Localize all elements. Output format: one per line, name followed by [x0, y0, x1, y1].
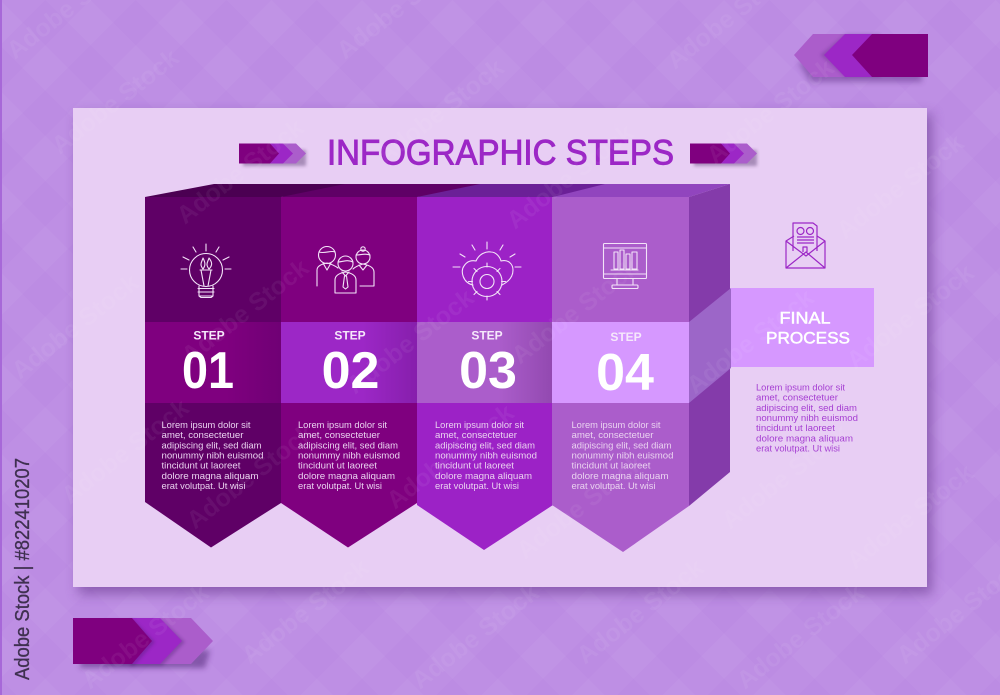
watermark: Adobe Stock [46, 44, 184, 160]
text: step 4 body: erat volutpat. Ut wisi [572, 480, 656, 491]
text: step 3 body: adipiscing elit, sed diam [435, 439, 535, 450]
text: step 1 body: amet, consectetuer [162, 429, 244, 440]
text: step 2 body: nonummy nibh euismod [298, 450, 400, 460]
text: final process body: amet, consectetuer [756, 392, 838, 403]
icon: monitor with chart [604, 244, 646, 288]
text: step 1 body: erat volutpat. Ut wisi [162, 480, 246, 491]
text: step 3 body: Lorem ipsum dolor sit [435, 419, 524, 430]
watermark: Adobe Stock [236, 554, 374, 670]
watermark: Adobe Stock [831, 129, 969, 245]
panel: step 3 [417, 197, 553, 550]
watermark: Adobe Stock [6, 269, 144, 385]
icon: cloud with gear [453, 242, 521, 300]
icon: envelope with document [786, 223, 825, 268]
panel: final process: PROCESS [766, 328, 850, 348]
text: final process body: adipiscing elit, sed diam [756, 402, 857, 413]
number 04: 04 [596, 344, 654, 402]
panel: final process: FINAL [780, 308, 830, 328]
watermark: Adobe Stock [341, 284, 479, 400]
watermark: Adobe Stock [731, 579, 869, 695]
panel: step 4 [552, 197, 689, 552]
watermark: Adobe Stock [571, 554, 709, 670]
title: INFOGRAPHIC STEPS [327, 134, 674, 172]
watermark: Adobe Stock [406, 579, 544, 695]
watermark: Adobe Stock [381, 399, 519, 515]
number 02: 02 [322, 342, 379, 400]
step label 04: STEP [610, 330, 642, 344]
text: step 2 body [298, 419, 400, 491]
text: step 4 body: nonummy nibh euismod [572, 450, 674, 460]
text: step 1 body: nonummy nibh euismod [162, 450, 264, 460]
arrow: bottom left decoration [73, 618, 213, 668]
arrow: top right decoration [794, 34, 928, 82]
text: step 2 body: dolore magna aliquam [298, 470, 395, 481]
text: step 3 body: tincidunt ut laoreet [435, 460, 514, 471]
watermark: Adobe Stock [176, 254, 314, 370]
text: step 3 body: amet, consectetuer [435, 429, 517, 440]
text: step 3 body: dolore magna aliquam [435, 470, 532, 481]
watermark: Adobe Stock [181, 419, 319, 535]
text: step 4 body: Lorem ipsum dolor sit [572, 419, 661, 430]
watermark: Adobe Stock [681, 284, 819, 400]
text: final process body: erat volutpat. Ut wisi [756, 442, 840, 453]
text: step 2 body: erat volutpat. Ut wisi [298, 480, 382, 491]
watermark: Adobe Stock [171, 114, 309, 230]
panel: step 2 [281, 197, 417, 548]
text: final process body: Lorem ipsum dolor sit [756, 382, 845, 392]
text: step 3 body: erat volutpat. Ut wisi [435, 480, 519, 491]
panel: main card [73, 108, 932, 594]
number 03: 03 [459, 342, 517, 400]
watermark: Adobe Stock [511, 449, 649, 565]
text: step 4 body: tincidunt ut laoreet [572, 460, 651, 471]
text: step 2 body: Lorem ipsum dolor sit [298, 419, 387, 430]
icon: team of people [317, 246, 374, 293]
text: step 4 body [572, 419, 674, 491]
watermark: Adobe Stock [506, 254, 644, 370]
text: step 1 body [162, 419, 264, 491]
text: step 1 body: adipiscing elit, sed diam [162, 439, 262, 450]
3D top face [145, 184, 730, 197]
text: step 4 body: adipiscing elit, sed diam [572, 439, 672, 450]
text: final process body [756, 382, 858, 453]
arrow: title right [690, 144, 757, 166]
watermark: Adobe Stock [56, 394, 194, 510]
text: step 1 body: dolore magna aliquam [162, 470, 259, 481]
watermark: Adobe Stock [716, 419, 854, 535]
watermark: Adobe Stock [841, 259, 979, 375]
text: final process body: tincidunt ut laoreet [756, 422, 835, 433]
panel: step 1 [145, 197, 281, 548]
watermark: Adobe Stock [76, 579, 214, 695]
watermark: Adobe Stock [371, 54, 509, 170]
watermark: Adobe Stock [841, 459, 979, 575]
text: step 4 body: amet, consectetuer [572, 429, 654, 440]
text: final process body: dolore magna aliquam [756, 432, 853, 443]
text: step 1 body: tincidunt ut laoreet [162, 460, 241, 471]
step label 01: STEP [193, 328, 225, 342]
step label 02: STEP [334, 328, 366, 342]
step label 03: STEP [471, 328, 503, 342]
text: step 3 body: nonummy nibh euismod [435, 450, 537, 460]
arrow: title left [239, 144, 306, 166]
text: final process body: nonummy nibh euismod [756, 412, 858, 423]
3D side face [689, 184, 731, 506]
icon: light bulb [181, 244, 231, 298]
stock id label: Adobe Stock | #822410207 [12, 458, 34, 680]
text: step 2 body: adipiscing elit, sed diam [298, 439, 398, 450]
number 01: 01 [182, 342, 234, 400]
watermark: Adobe Stock [701, 54, 839, 170]
text: step 2 body: tincidunt ut laoreet [298, 460, 377, 471]
text: step 2 body: amet, consectetuer [298, 429, 380, 440]
watermark: Adobe Stock [501, 119, 639, 235]
text: step 4 body: dolore magna aliquam [572, 470, 669, 481]
text: step 1 body: Lorem ipsum dolor sit [162, 419, 251, 430]
panel: final process [731, 288, 874, 367]
text: step 3 body [435, 419, 537, 491]
